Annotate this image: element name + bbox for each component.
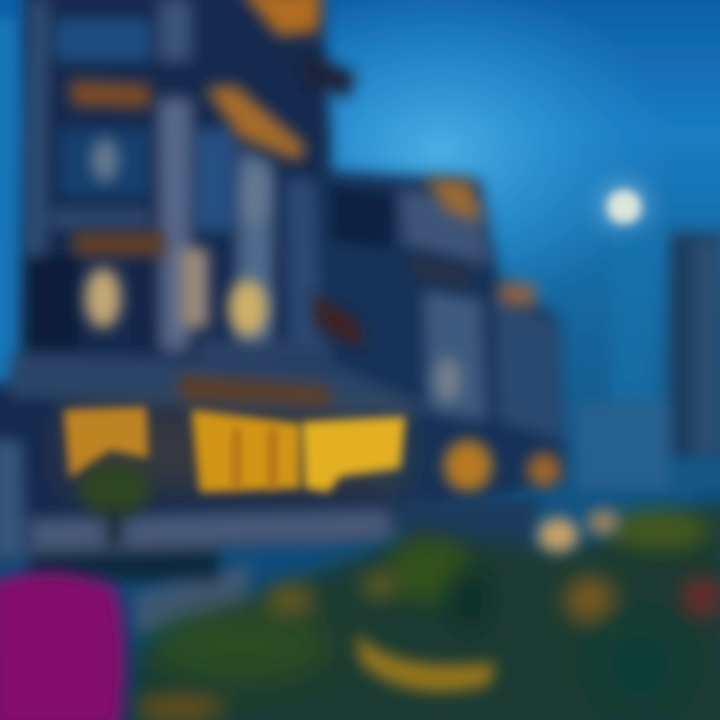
balconies and warm roof accents <box>70 0 535 406</box>
base and pavement <box>0 440 540 635</box>
small tree in front of entrance <box>79 464 151 548</box>
distant towers <box>575 230 720 490</box>
main building mass <box>0 0 565 560</box>
lit upper windows <box>85 138 461 403</box>
magenta flowers <box>0 571 125 720</box>
moon <box>596 179 652 235</box>
foreground foliage <box>130 500 720 720</box>
lit ground floor windows <box>60 405 561 495</box>
street lights <box>538 509 619 552</box>
